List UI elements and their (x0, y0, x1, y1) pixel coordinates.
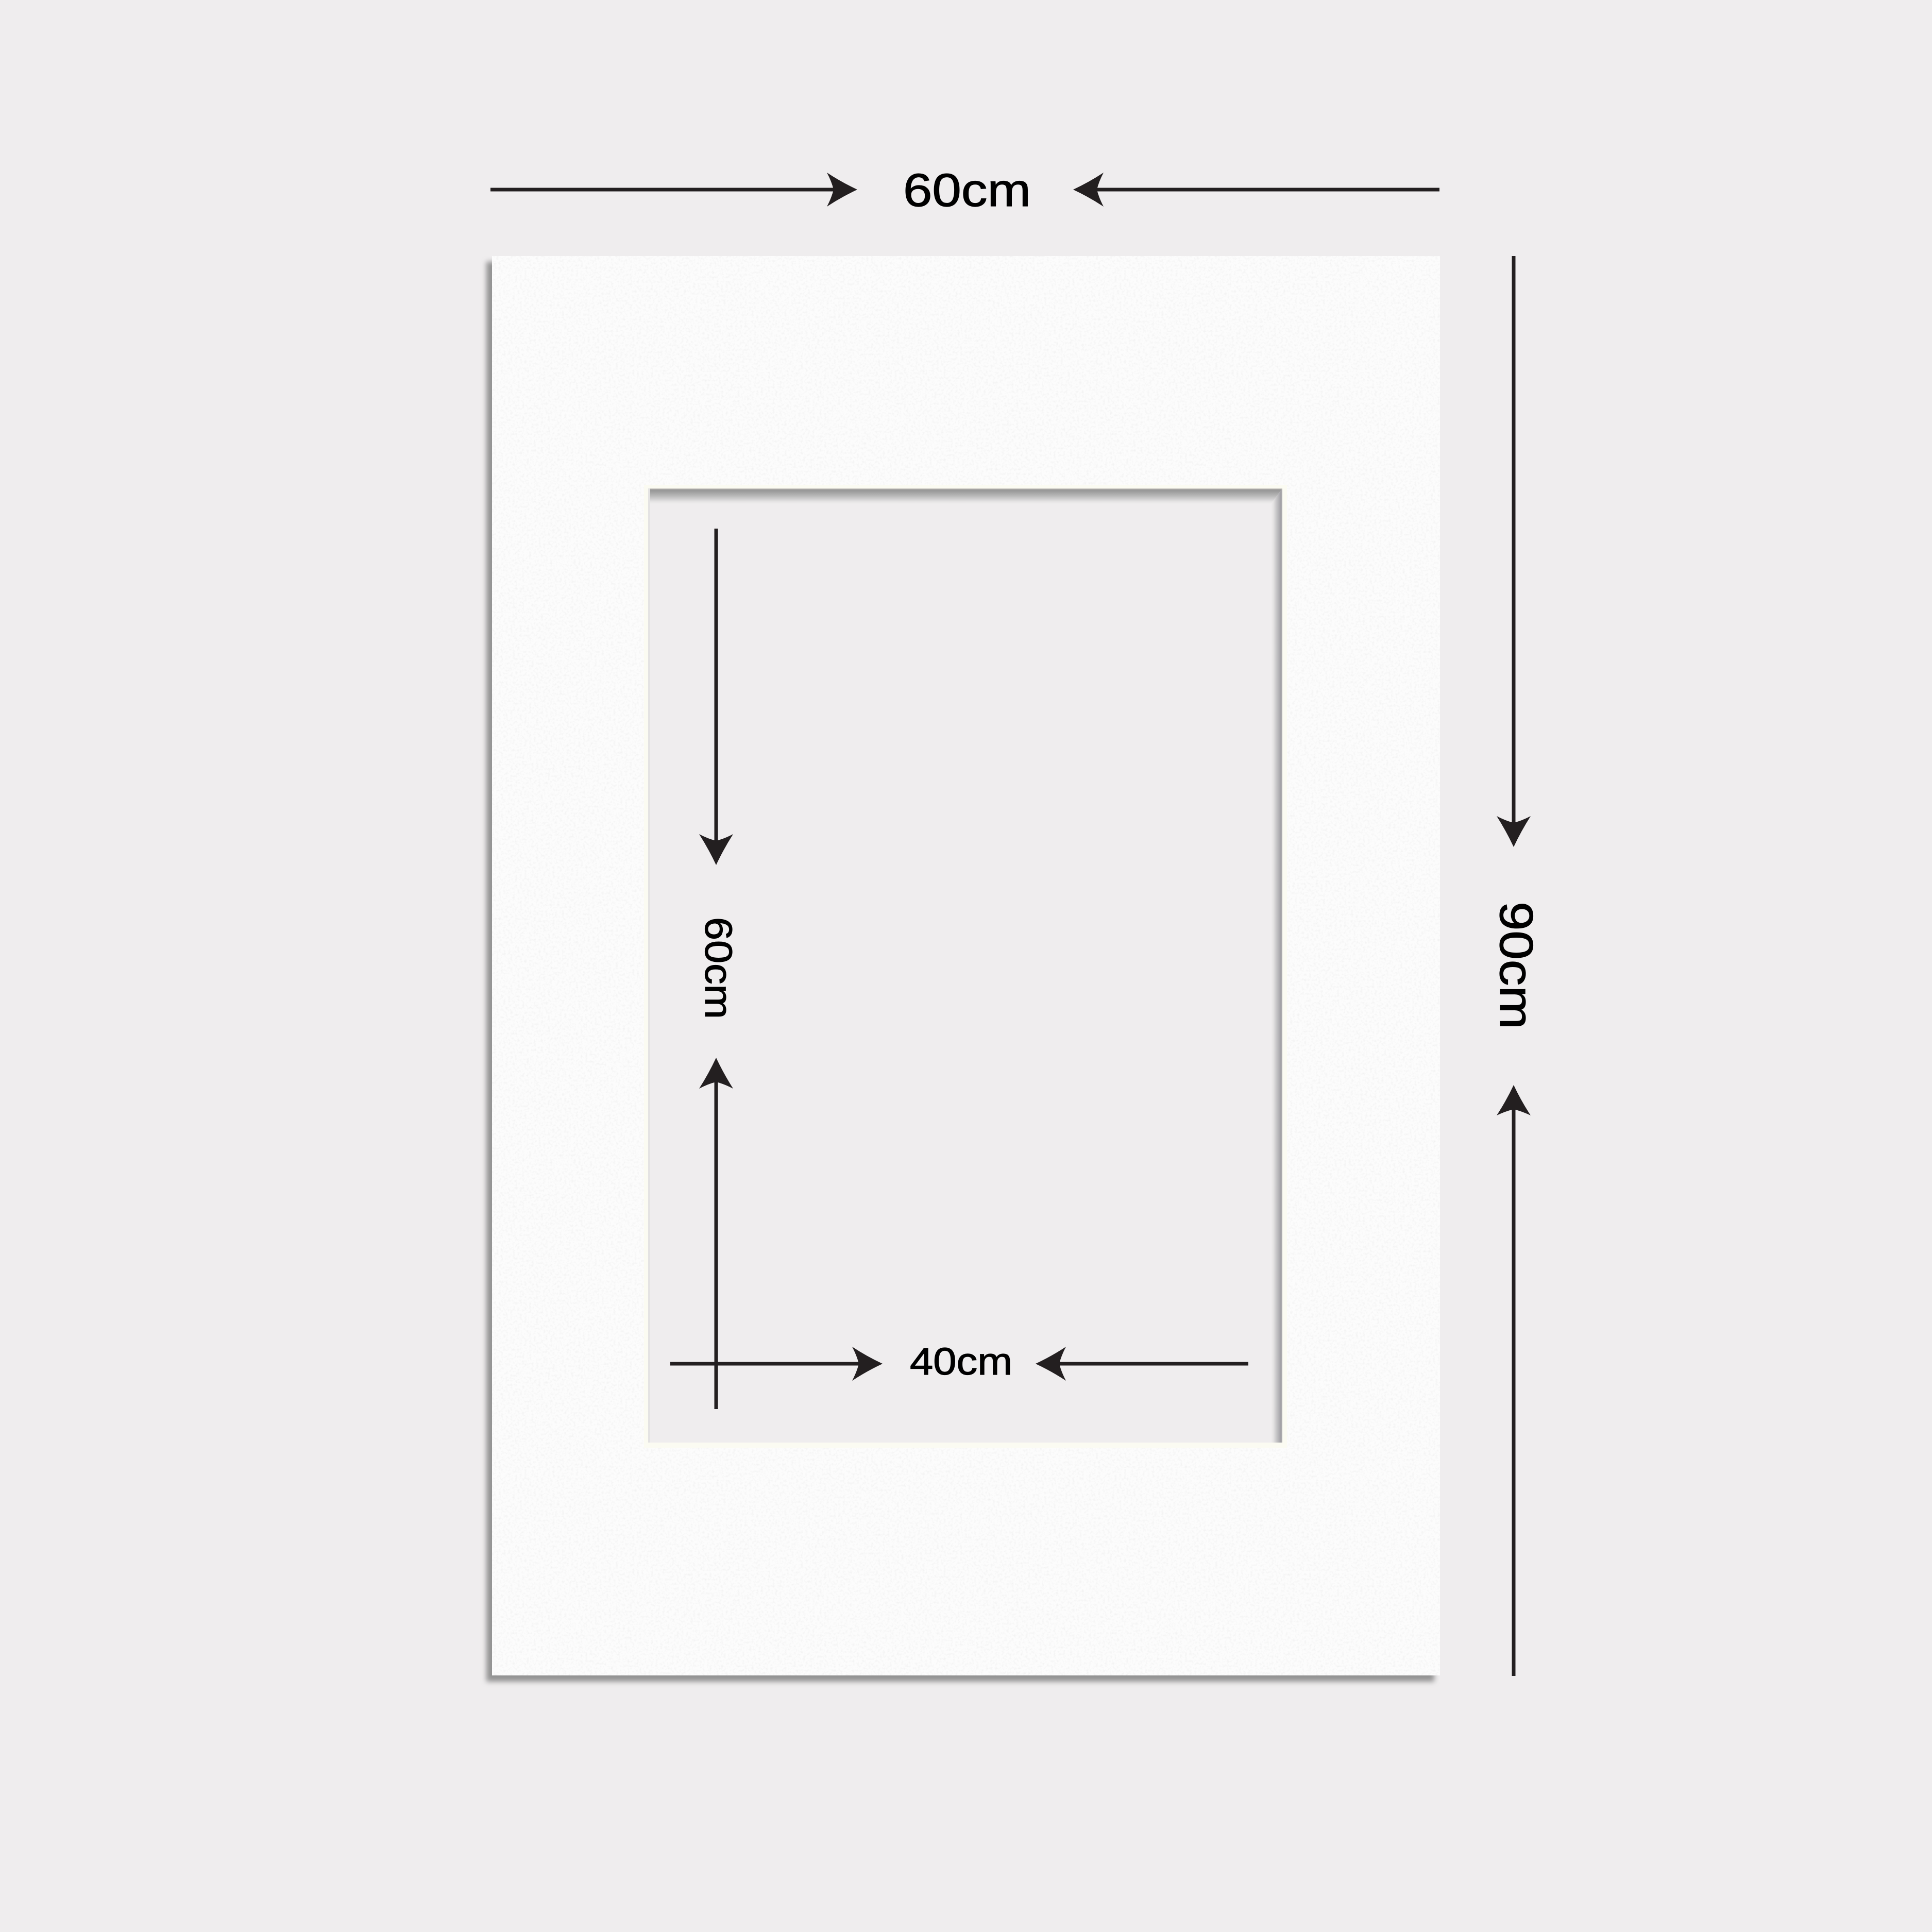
arrow: inner width, left segment (670, 1347, 883, 1381)
label: inner height 60cm: 60cm (697, 917, 740, 1019)
window right inner shadow (1271, 488, 1282, 1443)
arrow: inner width, right segment (1036, 1347, 1248, 1381)
mat paper grain (492, 256, 1440, 1675)
arrow: top width, right segment (1073, 173, 1439, 207)
label: inner width 40cm: 40cm (910, 1340, 1012, 1383)
arrow: inner height, upper segment (699, 529, 733, 865)
cream bevel around window (644, 485, 1287, 1448)
mat drop shadow (486, 262, 1434, 1682)
window opening (648, 488, 1282, 1443)
mat board surface (492, 256, 1440, 1675)
arrow: inner height, lower segment (699, 1058, 733, 1409)
label: outer width 60cm: 60cm (903, 165, 1031, 216)
arrow: top width, left segment (490, 173, 857, 207)
arrow: right height, upper segment (1497, 256, 1531, 847)
label: outer height 90cm: 90cm (1490, 902, 1542, 1029)
window top inner shadow (650, 488, 1282, 504)
arrow: right height, lower segment (1497, 1085, 1531, 1676)
panel: white mat board with window (486, 256, 1440, 1682)
window left inner shadow (648, 488, 650, 1443)
